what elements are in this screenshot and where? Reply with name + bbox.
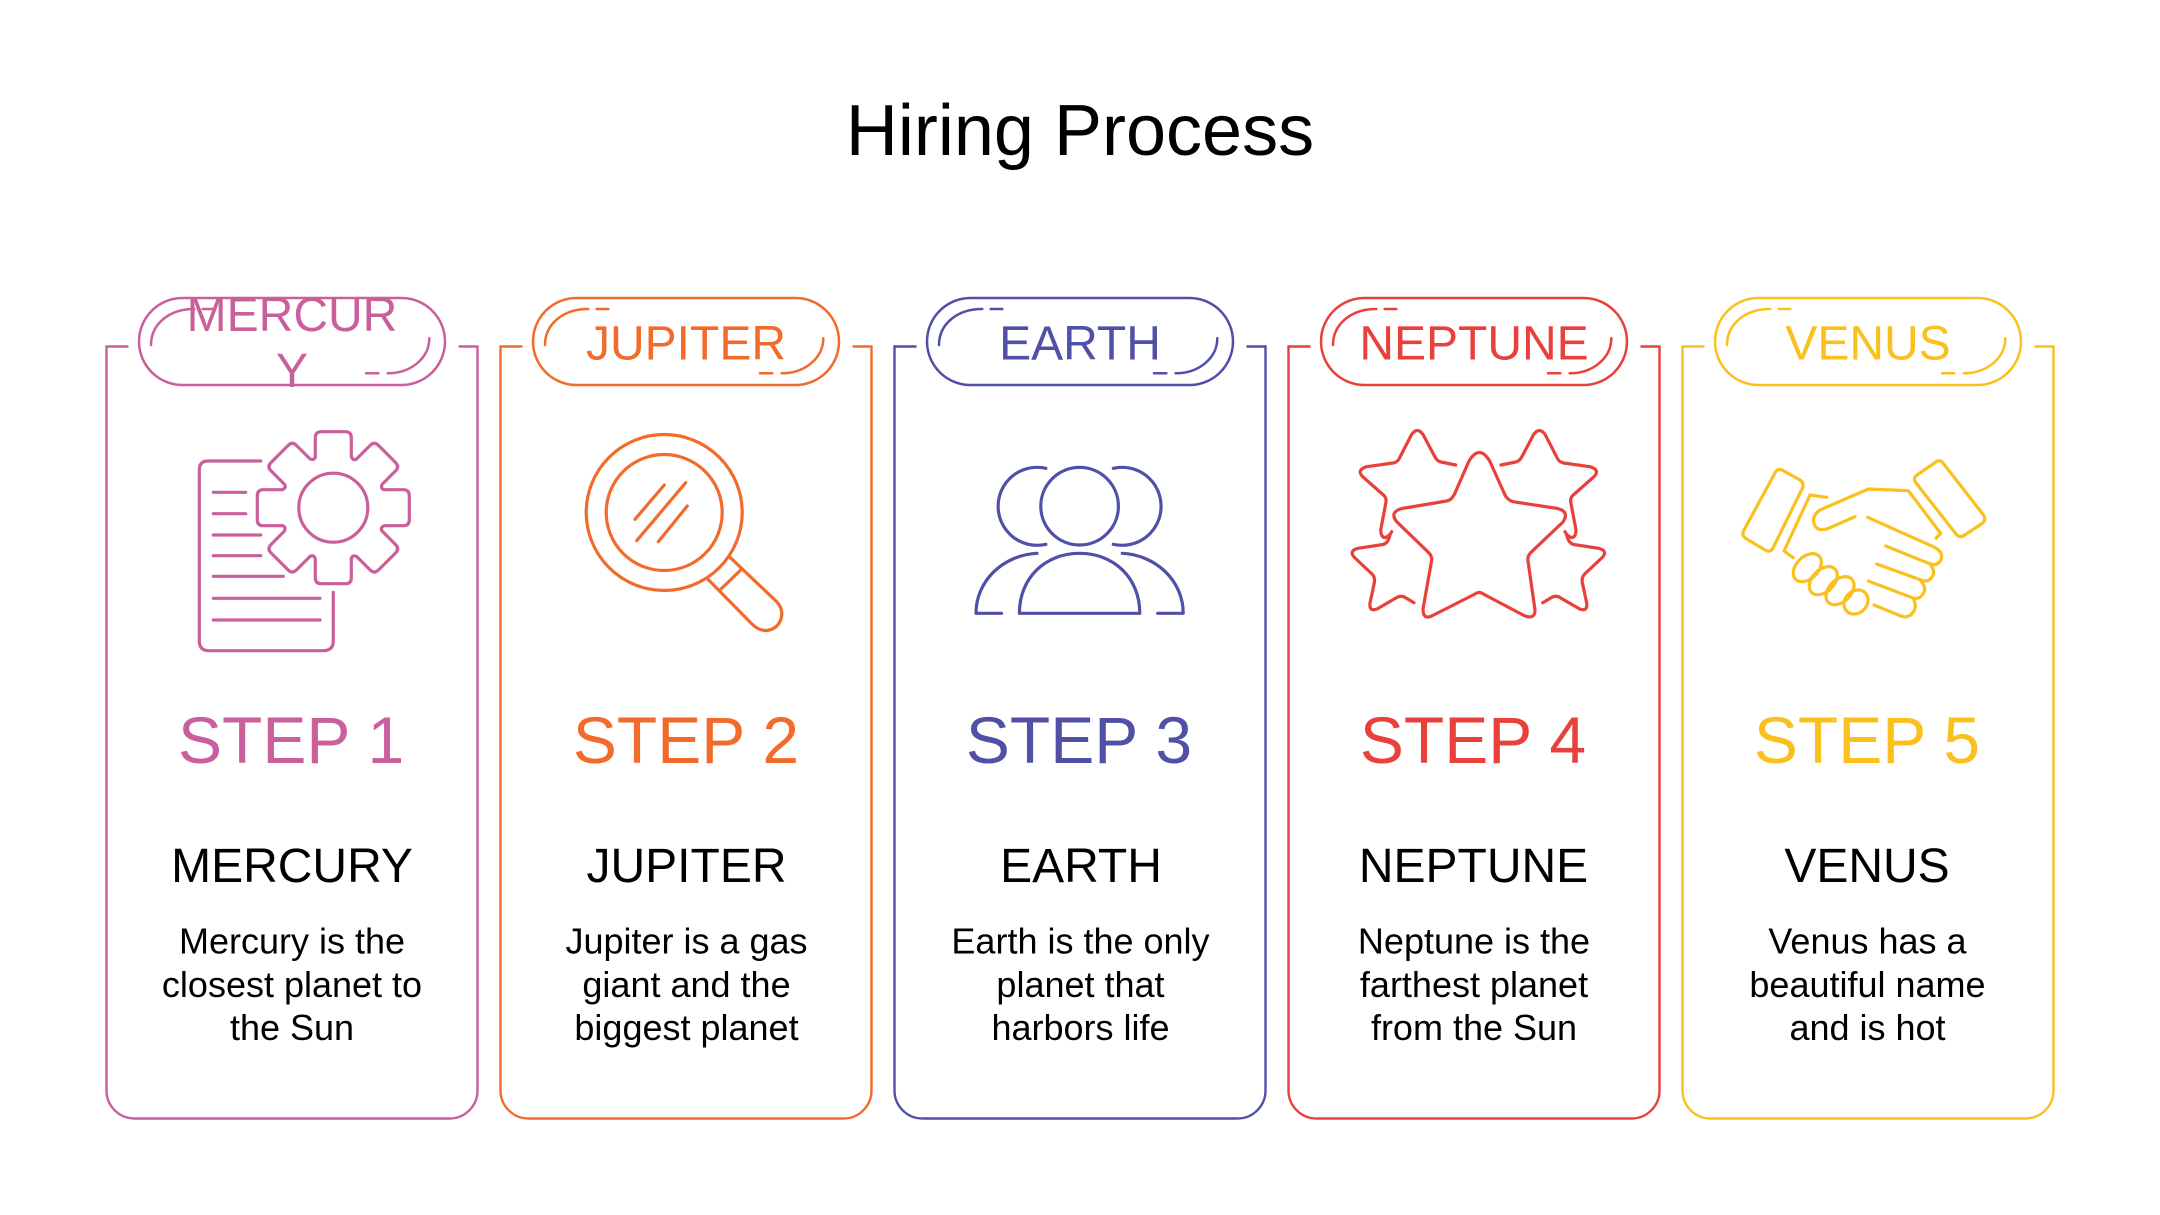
pill label: earth <box>927 298 1233 385</box>
description: giant and the <box>582 964 791 1005</box>
description <box>1749 920 1986 1048</box>
description <box>1358 920 1590 1048</box>
description: harbors life <box>991 1007 1170 1048</box>
pill label: venus <box>1715 298 2021 385</box>
description: closest planet to <box>162 964 422 1005</box>
panel: step 5 venus <box>1682 298 2054 1118</box>
title: Hiring Process <box>846 91 1314 171</box>
description: Earth is the only <box>951 920 1210 962</box>
pill label: jupiter: JUPITER <box>586 318 786 370</box>
description <box>951 920 1210 1048</box>
description: Venus has a <box>1768 920 1968 962</box>
pill label: jupiter <box>533 298 839 385</box>
icon: group of people <box>976 467 1183 613</box>
heading: MERCURY <box>171 840 413 893</box>
description: Neptune is the <box>1358 920 1590 962</box>
pill label: earth: EARTH <box>999 318 1161 370</box>
card outline <box>1288 346 1660 1118</box>
heading: NEPTUNE <box>1359 840 1588 893</box>
card outline <box>500 346 872 1118</box>
card outline <box>894 346 1266 1118</box>
pill label: mercury: Y <box>276 345 308 398</box>
pill label: venus: VENUS <box>1785 318 1951 370</box>
description <box>565 920 808 1048</box>
description: beautiful name <box>1749 964 1986 1005</box>
panel: step 4 neptune <box>1288 298 1660 1118</box>
pill label: mercury <box>139 289 445 398</box>
panel: step 2 jupiter <box>500 298 872 1118</box>
step label: STEP 2 <box>573 703 799 777</box>
description: and is hot <box>1789 1007 1946 1048</box>
step label: STEP 1 <box>178 703 404 777</box>
panel: step 1 mercury <box>106 289 478 1118</box>
icon: magnifying glass <box>586 434 782 631</box>
step label: STEP 3 <box>966 703 1192 777</box>
icon: five stars <box>1352 430 1605 617</box>
step label: STEP 5 <box>1754 703 1980 777</box>
description: the Sun <box>230 1007 354 1048</box>
pill label: mercury: MERCUR <box>187 289 397 342</box>
description: farthest planet <box>1360 964 1588 1005</box>
card outline <box>106 346 478 1118</box>
icon: document with gear <box>199 432 409 651</box>
description: planet that <box>996 964 1165 1005</box>
description <box>162 920 422 1048</box>
icon: handshake <box>1743 461 1985 619</box>
description: Mercury is the <box>179 920 405 962</box>
pill label: neptune: NEPTUNE <box>1359 318 1589 370</box>
pill label: neptune <box>1321 298 1627 385</box>
heading: JUPITER <box>586 840 787 893</box>
description: Jupiter is a gas <box>565 920 808 962</box>
heading: EARTH <box>1000 840 1162 893</box>
heading: VENUS <box>1784 840 1950 893</box>
panel: step 3 earth <box>894 298 1266 1118</box>
card outline <box>1682 346 2054 1118</box>
description: biggest planet <box>574 1007 799 1048</box>
description: from the Sun <box>1371 1007 1577 1048</box>
step label: STEP 4 <box>1360 703 1586 777</box>
